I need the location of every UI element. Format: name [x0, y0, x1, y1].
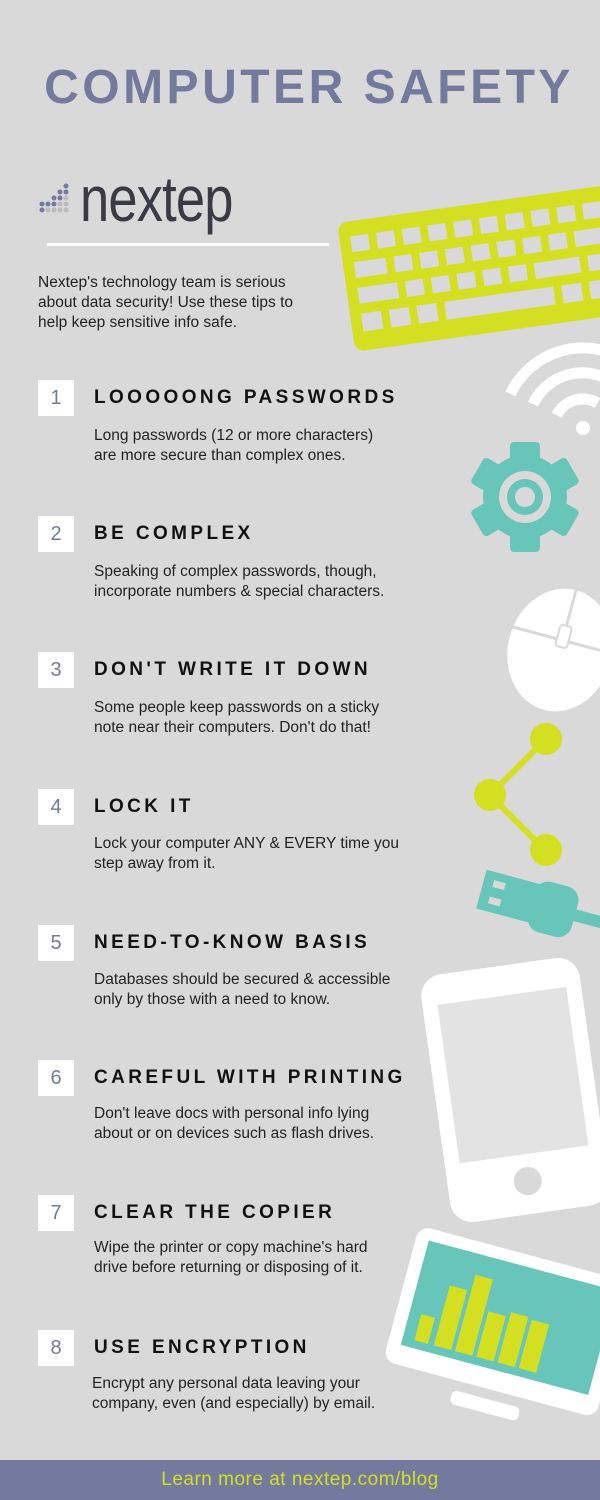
tip 4: 4: [50, 796, 62, 818]
tip 4: Lock your computer ANY & EVERY time you: [94, 835, 399, 852]
tip 1: LOOOOONG PASSWORDS: [94, 387, 398, 408]
tip 4: LOCK IT: [94, 796, 194, 817]
icon: gear: [470, 442, 580, 552]
tip 5: 5: [50, 932, 62, 954]
tip 8: 8: [50, 1337, 62, 1359]
footer: [0, 1460, 600, 1500]
tip 3: DON'T WRITE IT DOWN: [94, 659, 371, 680]
tip 4: [38, 789, 399, 872]
tip 3: 3: [50, 659, 62, 681]
tip 8: company, even (and especially) by email.: [92, 1395, 375, 1412]
tip 3: [38, 652, 380, 736]
icon: monitor: [377, 1226, 600, 1441]
tip 7: 7: [50, 1202, 62, 1224]
tip 5: Databases should be secured & accessible: [94, 971, 390, 988]
icon: wifi: [510, 348, 600, 435]
intro text: Nextep's technology team is serious: [38, 274, 286, 291]
tip 7: Wipe the printer or copy machine's hard: [94, 1239, 367, 1256]
title: COMPUTER SAFETY: [44, 61, 574, 114]
tip 8: USE ENCRYPTION: [94, 1337, 310, 1358]
tip 2: Speaking of complex passwords, though,: [94, 563, 377, 580]
tip 8: [38, 1330, 375, 1412]
tip 1: 1: [50, 387, 62, 409]
icon: keyboard: [337, 183, 600, 352]
icon: phone: [418, 955, 600, 1225]
tip 2: [38, 516, 384, 600]
tip 7: drive before returning or disposing of it.: [94, 1259, 363, 1276]
tip 7: [38, 1195, 367, 1276]
tip 5: only by those with a need to know.: [94, 991, 330, 1008]
icon: share: [474, 723, 562, 866]
tip 4: step away from it.: [94, 855, 215, 872]
divider: [47, 243, 329, 246]
tip 1: are more secure than complex ones.: [94, 447, 346, 464]
intro text: help keep sensitive info safe.: [38, 314, 237, 331]
intro text: [38, 274, 293, 331]
tip 2: 2: [50, 523, 62, 545]
tip 7: CLEAR THE COPIER: [94, 1202, 335, 1223]
tip 6: Don't leave docs with personal info lying: [94, 1105, 369, 1122]
tip 1: [38, 380, 398, 464]
tip 2: BE COMPLEX: [94, 523, 254, 544]
tip 6: about or on devices such as flash drives.: [94, 1125, 374, 1142]
tip 6: CAREFUL WITH PRINTING: [94, 1067, 406, 1088]
tip 6: [38, 1060, 406, 1142]
intro text: about data security! Use these tips to: [38, 294, 293, 311]
footer: Learn more at nextep.com/blog: [161, 1469, 439, 1490]
icon: mouse: [494, 577, 600, 723]
tip 1: Long passwords (12 or more characters): [94, 427, 373, 444]
tip 3: note near their computers. Don't do that!: [94, 719, 371, 736]
tip 3: Some people keep passwords on a sticky: [94, 699, 379, 716]
icon: usb: [474, 865, 600, 949]
logo: nextep: nextep: [80, 163, 233, 235]
tip 5: [38, 925, 390, 1008]
tip 2: incorporate numbers & special characters.: [94, 583, 384, 600]
tip 5: NEED-TO-KNOW BASIS: [94, 932, 370, 953]
tip 6: 6: [50, 1067, 62, 1089]
tip 8: Encrypt any personal data leaving your: [92, 1375, 360, 1392]
